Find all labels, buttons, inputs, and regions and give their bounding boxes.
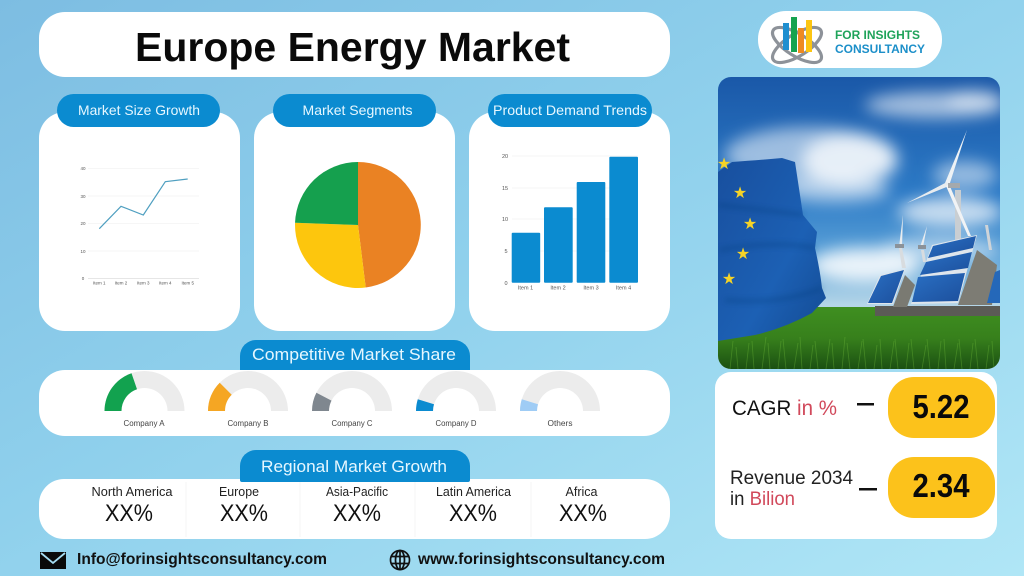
line chart — [80, 166, 199, 286]
region: europe — [219, 485, 268, 527]
panel: market size growth — [39, 94, 240, 331]
line chart: 40 — [80, 166, 86, 171]
title: Europe Energy Market — [135, 24, 570, 70]
heading pill: Market Size Growth — [78, 102, 200, 118]
region: asia-pacific: XX% — [333, 500, 381, 527]
CAGR value: 5.22 — [912, 388, 970, 425]
line chart: Item 3 — [137, 280, 150, 286]
pie chart — [295, 162, 421, 288]
heading pill — [488, 94, 652, 127]
heading pill — [240, 340, 470, 370]
bar chart: Item 1 — [518, 286, 533, 292]
gauge: company D: Company D — [436, 419, 477, 428]
line chart: Item 2 — [115, 280, 128, 286]
revenue value: 2.34 — [912, 467, 970, 504]
line chart: Item 4 — [159, 280, 172, 286]
line chart: 10 — [80, 249, 86, 254]
grass — [718, 307, 1000, 369]
panel: competitive market share — [39, 340, 670, 436]
region: asia-pacific — [326, 485, 388, 527]
line chart: 30 — [80, 194, 86, 199]
gauge: company B — [208, 371, 288, 428]
bar chart: Item 4 — [616, 286, 631, 292]
gauge: company A — [104, 371, 184, 428]
bar chart: 10 — [502, 217, 508, 223]
region: europe: XX% — [220, 500, 268, 527]
CAGR label: CAGR in % — [732, 397, 837, 420]
region: africa: Africa — [566, 485, 598, 499]
wind turbines — [895, 130, 992, 268]
icon: logo orbit and bars — [767, 17, 827, 69]
bar chart: 5 — [504, 249, 508, 255]
line chart: 20 — [80, 221, 86, 226]
photo: EU flag, wind turbines and solar panels — [717, 77, 1005, 369]
bar chart: 15 — [502, 186, 508, 192]
EU flag: ★ — [736, 246, 750, 263]
EU flag: ★ — [733, 185, 747, 202]
line chart: Item 5 — [181, 280, 194, 286]
dash — [857, 403, 874, 406]
bar chart: Item 3 — [583, 286, 599, 292]
gauge: company A: Company A — [124, 419, 165, 428]
region: latin america: Latin America — [436, 485, 511, 499]
bar chart — [502, 154, 638, 292]
bar chart: 20 — [502, 154, 508, 160]
revenue label: Revenue 2034 — [730, 468, 853, 489]
gauge: others — [520, 371, 600, 428]
region: africa — [559, 485, 607, 527]
gauge: company C: Company C — [332, 419, 373, 428]
panel: regional market growth — [39, 450, 670, 539]
region: north america — [92, 485, 173, 527]
dash — [859, 488, 877, 490]
EU flag: ★ — [743, 216, 757, 233]
footer: email: Info@forinsightsconsultancy.com — [77, 551, 327, 568]
line chart: Item 1 — [93, 280, 106, 286]
EU flag: ★ — [717, 156, 731, 173]
region: europe: Europe — [219, 485, 259, 499]
heading pill — [273, 94, 436, 127]
EU flag — [717, 156, 826, 341]
revenue label: in Bilion — [730, 489, 795, 510]
heading pill: Product Demand Trends — [493, 102, 647, 118]
panel: market segments — [254, 94, 455, 331]
logo text: FOR INSIGHTS — [835, 28, 920, 42]
icon: globe — [390, 550, 410, 570]
title — [39, 12, 670, 77]
EU flag: ★ — [722, 271, 736, 288]
bar chart: Item 2 — [550, 286, 566, 292]
panel: product demand trends — [469, 94, 670, 331]
region: latin america: XX% — [449, 500, 497, 527]
heading pill: Regional Market Growth — [261, 457, 447, 476]
gauge: company C — [312, 371, 392, 428]
revenue value — [888, 457, 995, 518]
heading pill: Competitive Market Share — [252, 345, 456, 364]
CAGR value — [888, 377, 995, 438]
logo — [758, 11, 942, 69]
heading pill — [240, 450, 470, 482]
line chart: 0 — [82, 276, 85, 281]
heading pill: Market Segments — [302, 102, 412, 118]
region: latin america — [436, 485, 511, 527]
gauge: others: Others — [548, 419, 572, 428]
logo text — [835, 28, 925, 56]
heading pill — [57, 94, 220, 127]
bar chart: 0 — [504, 281, 508, 287]
footer: website: www.forinsightsconsultancy.com — [417, 551, 665, 568]
region: north america: North America — [92, 485, 173, 499]
gauge: company D — [416, 371, 496, 428]
region: africa: XX% — [559, 500, 607, 527]
logo text: CONSULTANCY — [835, 42, 925, 56]
revenue label — [730, 468, 853, 510]
region: asia-pacific: Asia-Pacific — [326, 485, 388, 499]
panel: key metrics — [715, 372, 997, 539]
region: north america: XX% — [105, 500, 153, 527]
gauge: company B: Company B — [228, 419, 268, 428]
solar farm — [867, 235, 1000, 316]
icon: envelope — [40, 552, 66, 569]
